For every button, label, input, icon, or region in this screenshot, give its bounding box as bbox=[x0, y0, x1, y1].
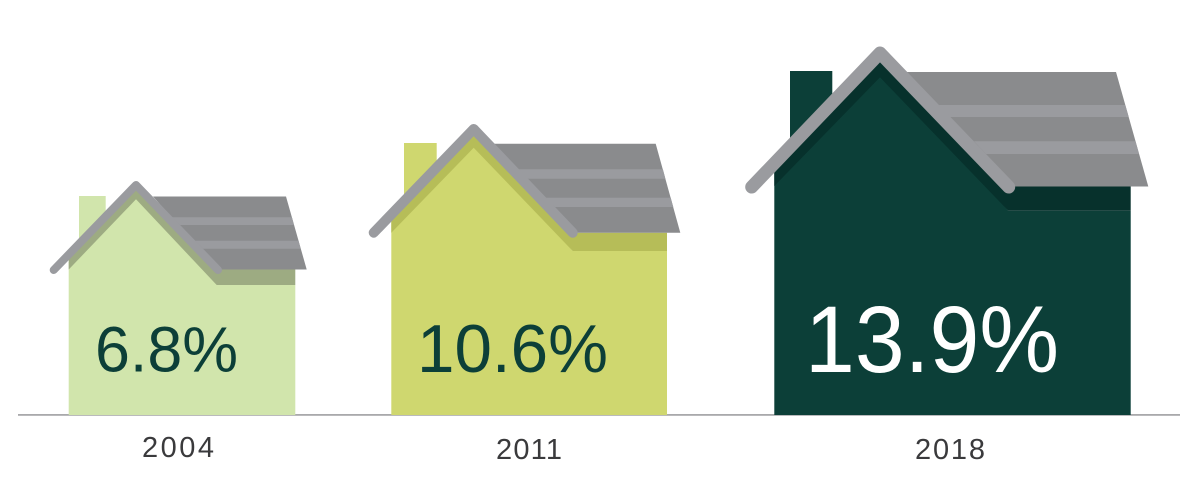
value 13.9%: 13.9% bbox=[805, 287, 1059, 393]
year 2004: 2004 bbox=[142, 432, 214, 464]
roof ridge 2004 bbox=[54, 185, 218, 270]
chimney 2004 bbox=[79, 196, 106, 256]
roof shingles 2004 bbox=[153, 196, 307, 270]
value 10.6%: 10.6% bbox=[417, 311, 608, 387]
roof shingles 2018 bbox=[907, 72, 1148, 186]
roof ridge 2018 bbox=[752, 53, 1009, 187]
roof shadow 2018 bbox=[774, 62, 1131, 211]
chimney 2011 bbox=[404, 143, 437, 213]
value 6.8%: 6.8% bbox=[95, 314, 238, 386]
body 2004 bbox=[69, 191, 295, 415]
body 2011 bbox=[391, 136, 667, 415]
roof shadow 2004 bbox=[69, 187, 295, 285]
year 2018: 2018 bbox=[915, 434, 985, 466]
house: 2018 bbox=[752, 53, 1148, 415]
roof ridge 2011 bbox=[374, 129, 573, 233]
body 2018 bbox=[774, 60, 1131, 415]
roof shingles 2011 bbox=[493, 144, 680, 233]
chimney 2018 bbox=[790, 71, 832, 151]
roof shadow 2011 bbox=[391, 135, 667, 251]
house: 2011 bbox=[374, 129, 680, 415]
year 2011: 2011 bbox=[496, 434, 562, 466]
house: 2004 bbox=[54, 185, 307, 415]
